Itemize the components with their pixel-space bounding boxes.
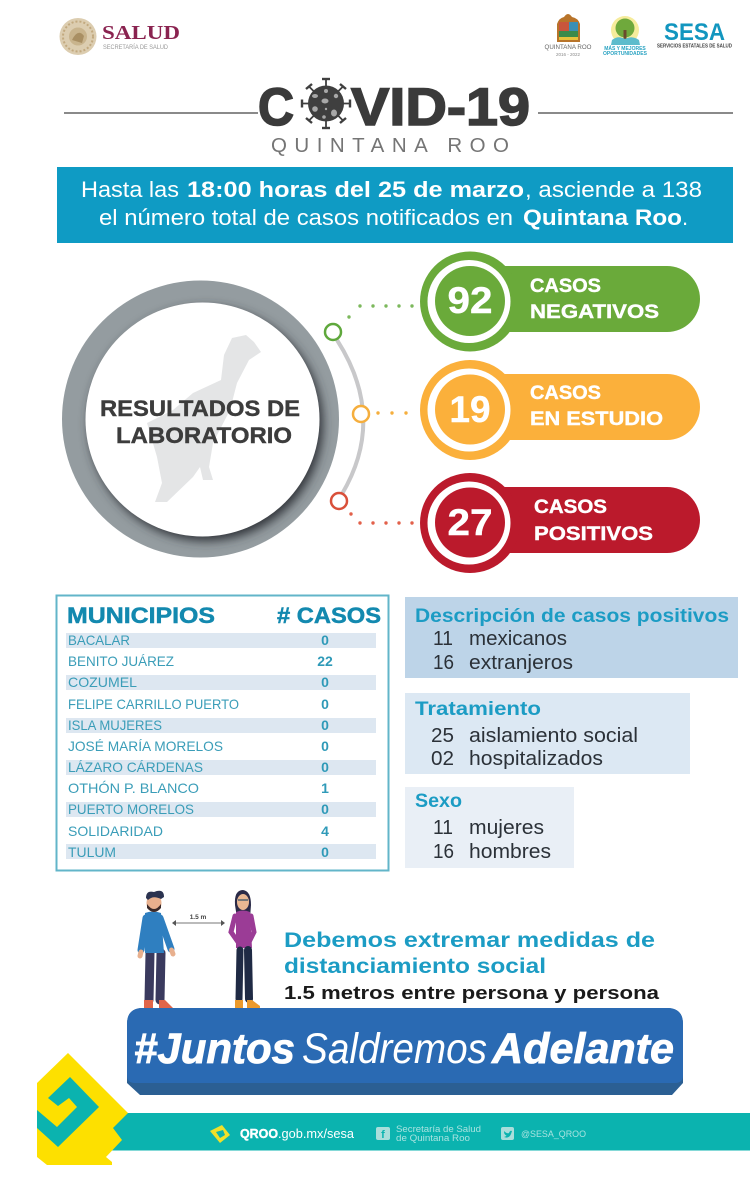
table: municipios: LÁZARO CÁRDENAS — [68, 759, 203, 775]
banner: hashtag — [127, 1008, 683, 1095]
banner: hashtag: #Juntos — [134, 1025, 295, 1073]
logo: Salud: SECRETARÍA DE SALUD — [103, 44, 169, 51]
panel: resultados de laboratorio — [62, 280, 339, 558]
table: municipios: BACALAR — [68, 632, 130, 648]
footer bar — [100, 1113, 750, 1150]
badge: casos negativos: 92 — [448, 280, 492, 321]
panel: sexo: mujeres — [469, 817, 544, 839]
badge: casos en estudio: CASOS — [530, 383, 601, 404]
banner: total de casos: Hasta las — [81, 177, 179, 202]
footer: facebook — [376, 1124, 481, 1143]
banner: hashtag: Saldremos — [302, 1025, 487, 1073]
badge: casos negativos: CASOS — [530, 276, 601, 297]
panel: descripción de casos positivos: 11 — [433, 628, 453, 650]
panel: descripción de casos positivos: Descripción de casos positivos — [415, 606, 729, 627]
table: municipios: PUERTO MORELOS — [68, 801, 194, 817]
illustration: distance arrow: 1.5 m — [190, 914, 207, 921]
table: municipios: 0 — [321, 717, 329, 733]
panel: descripción de casos positivos: 16 — [433, 652, 454, 674]
callout: distanciamiento social: 1.5 metros entre persona y persona — [284, 983, 660, 1003]
title: COVID-19: C — [258, 78, 294, 137]
badge: casos en estudio — [420, 360, 700, 460]
badge: casos positivos: 27 — [448, 502, 492, 543]
badge: casos positivos — [420, 473, 700, 573]
panel: sexo: Sexo — [415, 791, 462, 812]
connector arc — [325, 304, 414, 525]
logo: Quintana Roo crest: 2016 - 2022 — [556, 52, 581, 57]
logo: Salud — [60, 18, 180, 55]
illustration: woman — [231, 890, 260, 1008]
table: municipios: 1 — [321, 780, 329, 796]
badge: casos negativos: NEGATIVOS — [530, 302, 659, 323]
logo: tree: OPORTUNIDADES — [603, 51, 648, 57]
panel: tratamiento: Tratamiento — [415, 699, 541, 720]
table: municipios: 0 — [321, 759, 329, 775]
logo: SESA: SERVICIOS ESTATALES DE SALUD — [657, 44, 732, 50]
table: municipios: 0 — [321, 696, 329, 712]
table: municipios: 0 — [321, 674, 329, 690]
icon: virus — [302, 79, 350, 128]
title: COVID-19 — [64, 78, 733, 137]
table: municipios: JOSÉ MARÍA MORELOS — [68, 738, 223, 754]
table: municipios: # CASOS — [277, 603, 381, 628]
panel: resultados de laboratorio: LABORATORIO — [116, 423, 292, 448]
table: municipios: 0 — [321, 801, 329, 817]
panel: descripción de casos positivos: mexicanos — [469, 628, 567, 650]
table: municipios: ISLA MUJERES — [68, 717, 162, 733]
footer: web link: QROO — [240, 1126, 278, 1141]
badge: casos negativos — [420, 252, 700, 352]
logo: Salud: SALUD — [102, 22, 180, 44]
badge: casos en estudio: EN ESTUDIO — [530, 409, 663, 430]
badge: casos en estudio: 19 — [450, 389, 490, 430]
panel: sexo: 11 — [433, 817, 453, 839]
badge: casos positivos: POSITIVOS — [534, 524, 653, 545]
panel: tratamiento: hospitalizados — [469, 748, 603, 770]
banner: total de casos: el número total de casos notificados en — [99, 205, 513, 230]
panel: tratamiento — [405, 693, 690, 774]
table: municipios: SOLIDARIDAD — [68, 823, 163, 839]
map: Quintana Roo — [147, 335, 261, 502]
badge: casos positivos: CASOS — [534, 497, 607, 518]
panel: tratamiento: aislamiento social — [469, 725, 638, 747]
illustration: distance arrow — [172, 914, 225, 926]
footer: web link — [210, 1125, 355, 1143]
table: municipios: MUNICIPIOS — [67, 603, 215, 628]
logo: tree: MÁS Y MEJORES — [604, 45, 646, 52]
panel: descripción de casos positivos — [405, 597, 738, 678]
table: municipios: COZUMEL — [68, 674, 137, 690]
logo: yellow emblem — [37, 1053, 128, 1165]
footer: twitter — [501, 1127, 586, 1140]
banner: hashtag: Adelante — [491, 1025, 674, 1073]
table: municipios — [56, 596, 388, 870]
logo: SESA: SESA — [664, 19, 725, 46]
table: municipios: 22 — [317, 653, 333, 669]
footer: facebook: f — [381, 1129, 385, 1141]
panel: tratamiento: 25 — [431, 725, 454, 747]
illustration: man — [140, 891, 173, 1008]
panel: sexo: hombres — [469, 841, 551, 863]
footer: twitter: @SESA_QROO — [521, 1129, 586, 1139]
callout: distanciamiento social: Debemos extremar medidas de — [284, 929, 655, 952]
banner: total de casos — [57, 167, 733, 243]
footer: web link: .gob.mx/sesa — [278, 1126, 355, 1141]
title: COVID-19: VID-19 — [351, 78, 530, 137]
callout: distanciamiento social — [284, 929, 660, 1003]
table: municipios: 4 — [321, 823, 329, 839]
panel: descripción de casos positivos: extranjeros — [469, 652, 573, 674]
panel: sexo: 16 — [433, 841, 454, 863]
table: municipios: OTHÓN P. BLANCO — [68, 780, 199, 796]
banner: total de casos: 18:00 horas del 25 de marzo — [187, 177, 524, 202]
footer: facebook: de Quintana Roo — [396, 1133, 470, 1143]
table: municipios: 0 — [321, 738, 329, 754]
panel: sexo — [405, 787, 574, 868]
subtitle: Quintana Roo: QUINTANA ROO — [271, 134, 509, 157]
logo: tree — [603, 16, 648, 57]
table: municipios: FELIPE CARRILLO PUERTO — [68, 696, 239, 712]
banner: total de casos: , asciende a 138 — [525, 177, 702, 202]
table: municipios: TULUM — [68, 844, 116, 860]
panel: tratamiento: 02 — [431, 748, 454, 770]
footer: facebook: Secretaría de Salud — [396, 1124, 481, 1134]
callout: distanciamiento social: distanciamiento social — [284, 955, 546, 978]
panel: resultados de laboratorio: RESULTADOS DE — [100, 396, 300, 421]
logo: Quintana Roo crest: QUINTANA ROO — [544, 44, 592, 51]
table: municipios: 0 — [321, 632, 329, 648]
table: municipios: 0 — [321, 844, 329, 860]
banner: total de casos: . — [682, 205, 688, 230]
logo: Quintana Roo crest — [544, 14, 592, 57]
table: municipios: BENITO JUÁREZ — [68, 653, 174, 669]
banner: total de casos: Quintana Roo — [523, 205, 682, 230]
